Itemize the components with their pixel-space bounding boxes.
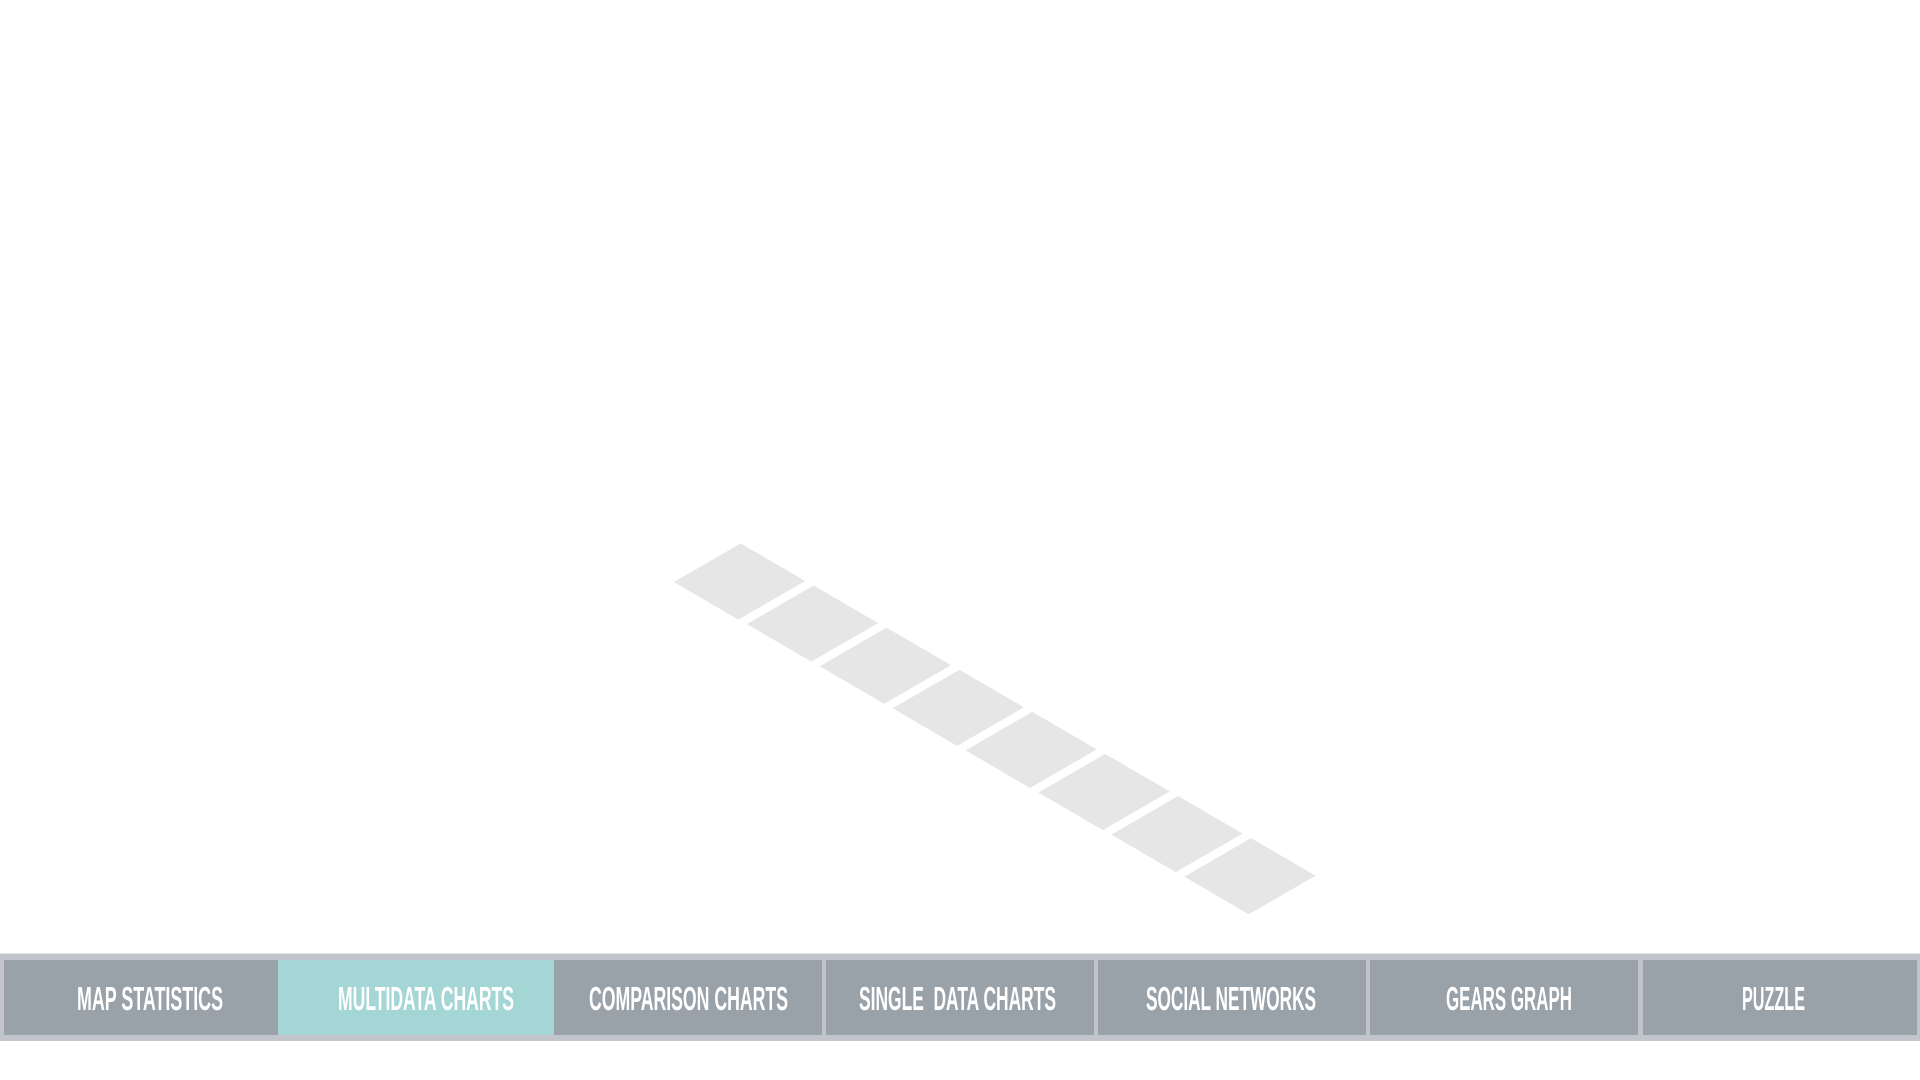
tab: gears graph: GEARS GRAPH	[1446, 980, 1572, 1017]
tab: single data charts	[826, 960, 1094, 1035]
tile 6	[1040, 754, 1169, 830]
bar background	[0, 954, 1920, 1041]
tile 3	[821, 628, 950, 703]
tab: social networks	[1098, 960, 1366, 1035]
navigation bar	[0, 954, 1920, 1041]
tab: map statistics: MAP STATISTICS	[77, 980, 223, 1017]
tab: multidata charts (active): MULTIDATA CHARTS	[338, 980, 514, 1017]
tile 8	[1185, 839, 1315, 914]
tab: comparison charts	[554, 960, 822, 1035]
tile 2	[748, 586, 877, 661]
tab: puzzle: PUZZLE	[1742, 980, 1805, 1017]
tab: comparison charts: COMPARISON CHARTS	[589, 980, 788, 1017]
tab: puzzle	[1643, 960, 1917, 1035]
tab: single data charts: SINGLE DATA CHARTS	[859, 980, 1056, 1017]
tab: multidata charts (active)	[278, 960, 554, 1035]
tile 4	[894, 670, 1023, 745]
tile 1	[675, 544, 804, 619]
tab: gears graph	[1370, 960, 1638, 1035]
tile 5	[967, 712, 1096, 787]
tile 7	[1112, 797, 1242, 872]
isometric tile strip	[675, 544, 1315, 914]
tab: social networks: SOCIAL NETWORKS	[1146, 980, 1316, 1017]
tab: map statistics	[4, 960, 278, 1035]
